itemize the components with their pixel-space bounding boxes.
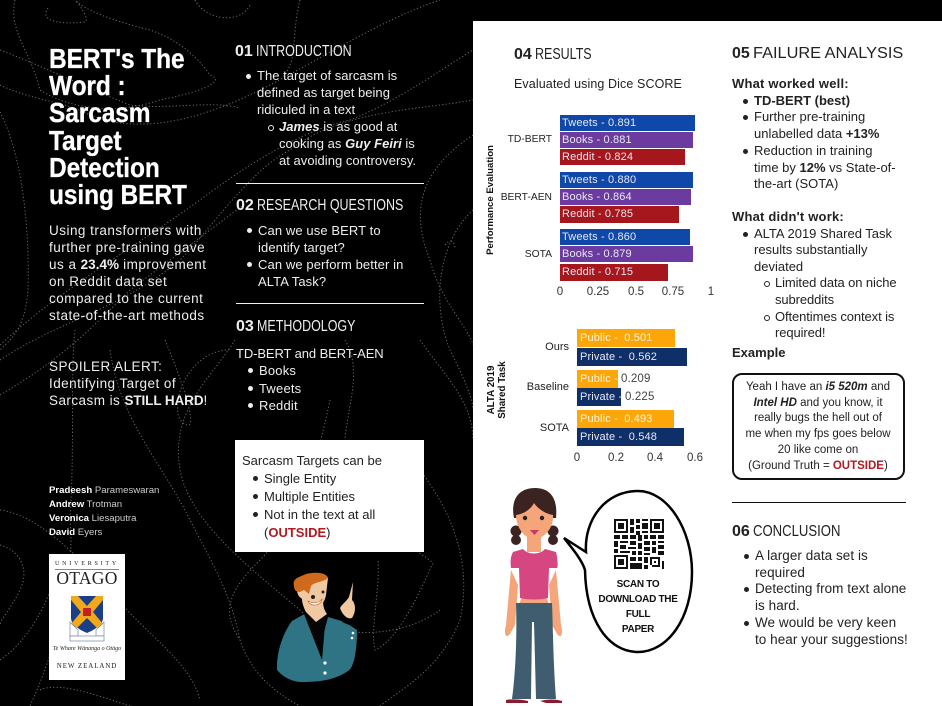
bubble text — [598, 578, 678, 634]
text: what didn't work: ALTA 2019 Shared Task — [754, 226, 892, 241]
bar chart: ALTA 2019 shared task: 0.4 — [647, 452, 663, 464]
bar chart: performance evaluation: Reddit - 0.715 — [562, 266, 633, 278]
heading: 04 results: RESULTS — [535, 46, 591, 63]
text: what worked well: TD-BERT (best) — [754, 93, 850, 108]
summary text: compared to the current — [49, 291, 203, 306]
heading: 02 research questions: RESEARCH QUESTIONS — [257, 197, 403, 214]
spoiler alert: Sarcasm is STILL HARD! — [49, 392, 208, 408]
text: what didn't work: deviated — [754, 259, 803, 274]
bar chart: performance evaluation: 0.75 — [662, 286, 684, 298]
text: what didn't work — [732, 209, 896, 340]
text: research questions: Can we use BERT to — [258, 223, 381, 238]
QR code — [614, 519, 664, 569]
authors: Veronica Liesaputra — [49, 513, 136, 524]
title: Word : — [49, 70, 126, 101]
callout text: (Ground Truth = OUTSIDE) — [748, 460, 888, 472]
bubble text: DOWNLOAD THE — [598, 594, 678, 604]
top black strip and white panel — [473, 21, 942, 706]
text: methodology: Reddit — [259, 398, 298, 413]
logo: University of Otago — [49, 554, 125, 680]
bar chart: performance evaluation: Books - 0.864 — [562, 191, 632, 203]
text: research questions: identify target? — [258, 240, 345, 255]
text: conclusion: required — [755, 565, 805, 580]
text: evaluated: Evaluated using Dice SCORE — [514, 77, 682, 91]
text: methodology: Books — [259, 363, 296, 378]
text: what didn't work: results substantially — [754, 242, 867, 257]
bar chart: ALTA 2019 shared task: Ours — [545, 341, 569, 353]
spoiler alert: SPOILER ALERT: — [49, 358, 162, 374]
axis title: ALTA 2019 — [486, 366, 497, 414]
text: what worked well — [732, 76, 896, 191]
bar chart: performance evaluation: TD-BERT — [508, 134, 552, 145]
bar chart: performance evaluation: Tweets - 0.860 — [562, 231, 636, 243]
text: what didn't work: Oftentimes context is — [775, 309, 894, 324]
text: sarcasm targets list: (OUTSIDE) — [264, 525, 330, 540]
text: methodology — [236, 346, 384, 413]
text: sarcasm targets list: Single Entity — [264, 471, 336, 486]
heading: 03 methodology: 03 — [236, 318, 254, 335]
summary text: on Reddit data set — [49, 274, 167, 289]
bar chart: ALTA 2019 shared task: 0 — [574, 452, 580, 464]
bar chart: performance evaluation: Reddit - 0.785 — [562, 208, 633, 220]
text: what didn't work: required! — [775, 325, 825, 340]
panel: sarcasm targets — [235, 440, 424, 552]
title: BERT's The — [49, 43, 184, 74]
text: introduction — [246, 68, 416, 168]
text: what worked well: What worked well: — [732, 76, 849, 91]
text: conclusion: to hear your suggestions! — [755, 632, 908, 647]
text: what didn't work: Limited data on niche — [775, 275, 896, 290]
authors — [49, 485, 159, 538]
heading: 01 introduction: INTRODUCTION — [256, 43, 351, 60]
text: sarcasm targets list: Multiple Entities — [264, 489, 355, 504]
text: what worked well: time by 12% vs State-of- — [754, 160, 896, 175]
text: conclusion: is hard. — [755, 598, 800, 613]
callout text: really bugs the hell out of — [754, 412, 882, 424]
text: conclusion: Detecting from text alone — [755, 581, 906, 596]
heading: 03 methodology: METHODOLOGY — [257, 318, 355, 335]
heading: 01 introduction: 01 — [235, 43, 253, 60]
axis title: Shared Task — [497, 361, 508, 419]
icon: crest shield — [70, 596, 104, 642]
authors: Andrew Trotman — [49, 499, 122, 510]
bar chart: ALTA 2019 shared task — [486, 329, 703, 464]
bar chart: performance evaluation: SOTA — [525, 249, 552, 260]
bar chart: ALTA 2019 shared task: Private - 0.562 — [580, 351, 657, 363]
text: conclusion — [744, 548, 908, 647]
bar chart: performance evaluation: 0.5 — [628, 286, 644, 298]
text: what didn't work: subreddits — [775, 292, 834, 307]
text: what worked well: Further pre-training — [754, 109, 865, 124]
callout text: me when my fps goes below — [745, 428, 891, 440]
axis title — [486, 361, 508, 419]
spoiler alert: Identifying Target of — [49, 376, 176, 390]
text: introduction: James is as good at — [279, 119, 397, 134]
heading: 04 results: 04 — [514, 46, 532, 63]
text: research questions: Can we perform better in — [258, 257, 403, 272]
bar chart: performance evaluation: Books - 0.881 — [562, 134, 632, 146]
spoiler alert — [49, 358, 208, 408]
bubble text: PAPER — [622, 624, 654, 634]
text: introduction: cooking as Guy Feiri is — [279, 136, 415, 151]
heading: 05 failure analysis: FAILURE ANALYSIS — [753, 45, 903, 62]
title: Sarcasm — [49, 97, 150, 128]
callout text — [745, 381, 891, 472]
axis title: Performance Evaluation — [485, 145, 496, 255]
callout: example — [732, 373, 905, 480]
authors: David Eyers — [49, 527, 102, 538]
bar chart: performance evaluation: Tweets - 0.880 — [562, 174, 636, 186]
bar chart: performance evaluation: 0.25 — [587, 286, 609, 298]
bar chart: performance evaluation: Tweets - 0.891 — [562, 117, 636, 129]
bar chart: performance evaluation: Books - 0.879 — [562, 248, 632, 260]
text: what worked well: the-art (SOTA) — [754, 176, 838, 191]
value label: 0.209 — [621, 373, 651, 385]
text: what worked well: unlabelled data +13% — [754, 126, 879, 141]
bar chart: ALTA 2019 shared task: Private - — [580, 391, 622, 403]
text: sarcasm targets list: Sarcasm Targets can be — [242, 453, 382, 468]
bar chart: ALTA 2019 shared task: 0.6 — [687, 452, 703, 464]
bubble text: SCAN TO — [617, 578, 659, 590]
bubble text: FULL — [626, 608, 650, 620]
summary text — [49, 223, 206, 323]
summary text: Using transformers with — [49, 223, 202, 238]
background: dark contour pattern — [0, 0, 473, 706]
text: introduction: ridiculed in a text — [257, 102, 355, 117]
heading: 06 conclusion: 06 — [732, 523, 750, 540]
title: using BERT — [49, 179, 187, 210]
heading: 06 conclusion: CONCLUSION — [753, 523, 840, 540]
text: methodology: TD-BERT and BERT-AEN — [236, 346, 384, 361]
icon: woman — [505, 488, 562, 703]
text: sarcasm targets list — [242, 453, 382, 540]
bar chart: performance evaluation: BERT-AEN — [501, 192, 552, 203]
bar chart: performance evaluation: Reddit - 0.824 — [562, 151, 633, 163]
text: introduction: defined as target being — [257, 85, 390, 100]
logo: University of Otago: OTAGO — [56, 568, 118, 588]
logo: University of Otago: Te Whare Wānanga o Otāgo — [53, 646, 121, 652]
title: Detection — [49, 152, 160, 183]
bar chart: performance evaluation: 1 — [708, 286, 714, 298]
icon: man pointing up — [276, 572, 357, 682]
text: research questions — [247, 223, 403, 289]
bar chart: ALTA 2019 shared task: Public - — [580, 373, 618, 385]
text: example heading: Example — [732, 345, 785, 360]
logo: University of Otago: NEW ZEALAND — [57, 662, 117, 670]
text: introduction: at avoiding controversy. — [279, 153, 416, 168]
bar chart: performance evaluation — [485, 115, 714, 298]
bar chart: ALTA 2019 shared task: Public - 0.493 — [580, 413, 653, 425]
bar chart: ALTA 2019 shared task: Public - 0.501 — [580, 332, 653, 344]
summary text: further pre-training gave — [49, 240, 205, 255]
text: what didn't work: What didn't work: — [732, 209, 844, 224]
callout text: Yeah I have an i5 520m and — [746, 381, 890, 393]
text: what worked well: Reduction in training — [754, 143, 873, 158]
callout text: 20 like come on — [778, 444, 858, 456]
text: conclusion: A larger data set is — [755, 548, 868, 563]
bar chart: performance evaluation: 0 — [557, 286, 563, 298]
title: Target — [49, 125, 121, 156]
summary text: us a 23.4% improvement — [49, 257, 206, 272]
text: research questions: ALTA Task? — [258, 274, 326, 289]
bar chart: ALTA 2019 shared task: SOTA — [540, 422, 569, 434]
callout text: Intel HD and you know, it — [753, 397, 883, 409]
bubble outline — [563, 490, 694, 654]
authors: Pradeesh Parameswaran — [49, 485, 159, 496]
heading: 02 research questions: 02 — [236, 197, 254, 214]
value label: 0.225 — [625, 391, 655, 403]
bar chart: ALTA 2019 shared task: Private - 0.548 — [580, 431, 657, 443]
text: conclusion: We would be very keen — [755, 615, 896, 630]
text: introduction: The target of sarcasm is — [257, 68, 397, 83]
summary text: state-of-the-art methods — [49, 308, 205, 323]
text: methodology: Tweets — [259, 381, 301, 396]
bar chart: ALTA 2019 shared task: Baseline — [527, 381, 569, 393]
text: sarcasm targets list: Not in the text at all — [264, 507, 375, 522]
speech bubble with QR code — [563, 490, 694, 654]
heading: 05 failure analysis: 05 — [732, 45, 750, 62]
logo: University of Otago: UNIVERSITY — [55, 561, 119, 567]
bar chart: ALTA 2019 shared task: 0.2 — [608, 452, 624, 464]
title — [48, 43, 187, 210]
